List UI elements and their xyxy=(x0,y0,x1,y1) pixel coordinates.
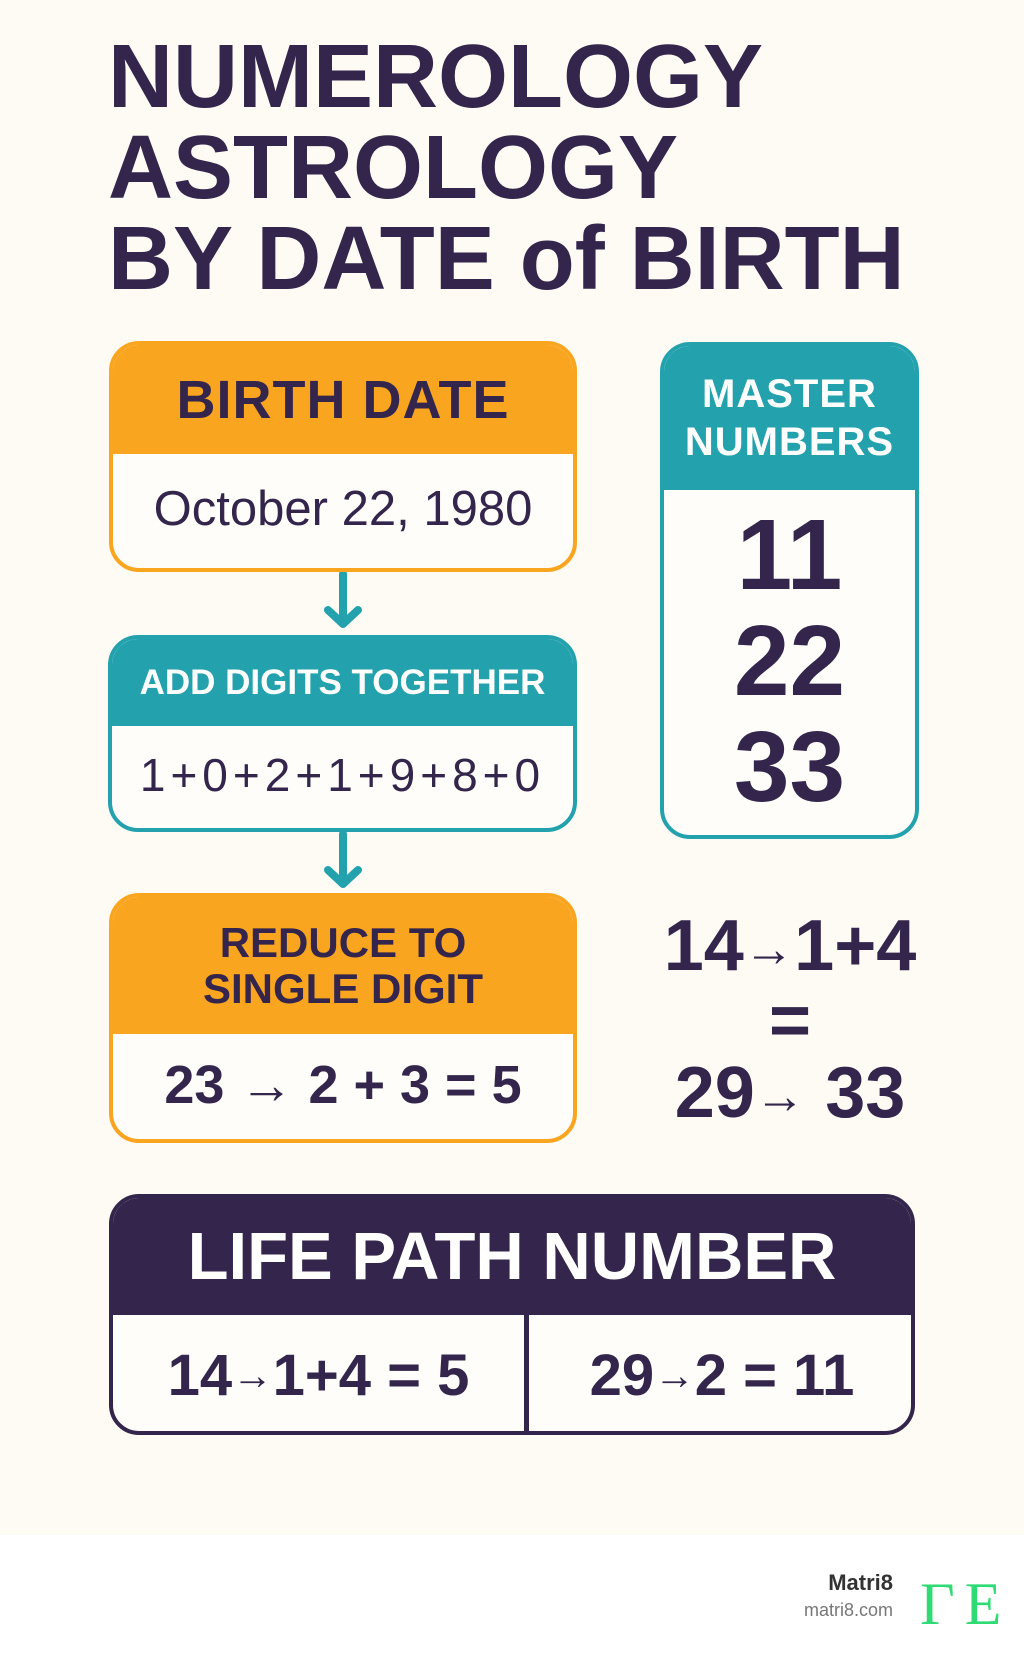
title: NUMEROLOGY xyxy=(108,27,763,127)
heading: life path xyxy=(113,1198,911,1315)
title: BY DATE of BIRTH xyxy=(108,209,905,309)
text: numbers xyxy=(734,498,845,822)
heading: master numbers: NUMBERS xyxy=(685,420,894,464)
cell: right: → xyxy=(654,1352,695,1398)
icon: logo: ΓΕ xyxy=(920,1571,1011,1637)
text: reduction: 23 → 2 + 3 = 5 xyxy=(164,1054,522,1114)
heading: reduce: SINGLE DIGIT xyxy=(203,964,483,1012)
heading: birth date xyxy=(113,345,573,454)
heading: master numbers xyxy=(664,346,915,490)
text: side equations: 14→1+4 xyxy=(664,906,916,986)
text: side equations: = xyxy=(769,981,811,1061)
panel: master numbers xyxy=(660,342,919,839)
heading: add digits xyxy=(112,639,573,726)
text: numbers: 33 xyxy=(734,710,845,822)
panel: life path xyxy=(109,1194,915,1435)
text: date: October 22, 1980 xyxy=(154,482,532,536)
heading: birth date: BIRTH DATE xyxy=(176,370,509,430)
title: ASTROLOGY xyxy=(108,118,678,218)
footer brand xyxy=(804,1570,893,1620)
title xyxy=(108,27,905,309)
heading: reduce xyxy=(113,897,573,1034)
footer brand: matri8.com xyxy=(804,1600,893,1620)
text: numbers: 22 xyxy=(734,604,845,716)
cell: left: → xyxy=(232,1352,273,1398)
text: side equations: 29→ 33 xyxy=(675,1053,905,1133)
cell: left: 14 1+4 = 5 xyxy=(168,1342,469,1408)
heading: life path: LIFE PATH NUMBER xyxy=(188,1219,836,1294)
cell: right: 29 2 = 11 xyxy=(590,1342,854,1408)
cell: left xyxy=(113,1315,529,1435)
arrow 1 xyxy=(324,572,362,628)
arrow 2 xyxy=(324,832,362,888)
heading: reduce: REDUCE TO xyxy=(220,918,466,966)
panel: birth date xyxy=(109,341,577,572)
heading: master numbers: MASTER xyxy=(702,372,877,416)
heading: add digits: ADD DIGITS TOGETHER xyxy=(140,662,545,702)
text: side equations xyxy=(664,906,916,1133)
footer brand: Matri8 xyxy=(828,1570,893,1595)
text: numbers: 11 xyxy=(737,498,842,610)
text: digit sum: 1+0+2+1+9+8+0 xyxy=(140,749,545,801)
panel: reduce xyxy=(109,893,577,1143)
panel: add digits xyxy=(108,635,577,832)
